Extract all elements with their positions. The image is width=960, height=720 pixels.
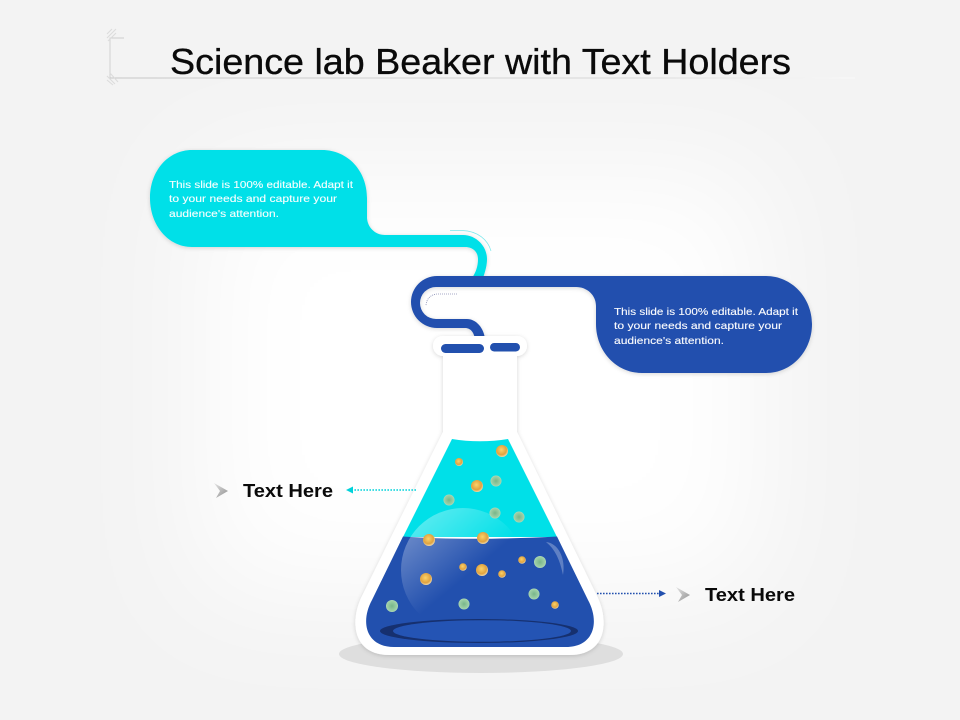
cyan holder text [169,179,353,220]
cyan liquid [403,439,557,537]
blue holder text: audience's attention. [614,335,724,347]
flask base ring [380,619,578,643]
bubbles [386,445,559,612]
blue holder text [614,306,798,347]
arrow: cyan pointer to left label [346,486,416,494]
blue holder text: This slide is 100% editable. Adapt it [614,306,798,318]
flask [355,336,604,655]
cyan holder text: to your needs and capture your [169,193,338,205]
glass glare left [401,508,525,632]
flask glass body [355,336,604,655]
left label [214,480,333,501]
arrow: blue pointer to right label [597,590,666,597]
title: Science lab Beaker with Text Holders [170,41,791,82]
blue liquid [366,536,594,647]
cyan holder text: This slide is 100% editable. Adapt it [169,179,353,191]
cyan tube highlight [450,230,491,251]
panel: blue speech holder [411,276,812,373]
title decoration: corner bracket and rule [107,29,855,85]
flask shadow [339,635,623,673]
cyan holder text: audience's attention. [169,208,279,220]
left label text: Text Here [243,480,333,501]
icon: left label arrowhead [214,483,228,498]
right label text: Text Here [705,584,795,605]
blue holder text: to your needs and capture your [614,320,783,332]
right label [676,584,795,605]
stopper right [490,343,520,352]
stopper left [441,344,484,353]
panel: cyan speech holder [150,150,491,278]
cyan holder shape with connector tube [150,150,487,278]
glass glare right [546,542,564,575]
blue tube highlight [426,294,457,306]
icon: right label arrowhead [676,587,690,602]
blue holder shape with connector tube [411,276,812,373]
